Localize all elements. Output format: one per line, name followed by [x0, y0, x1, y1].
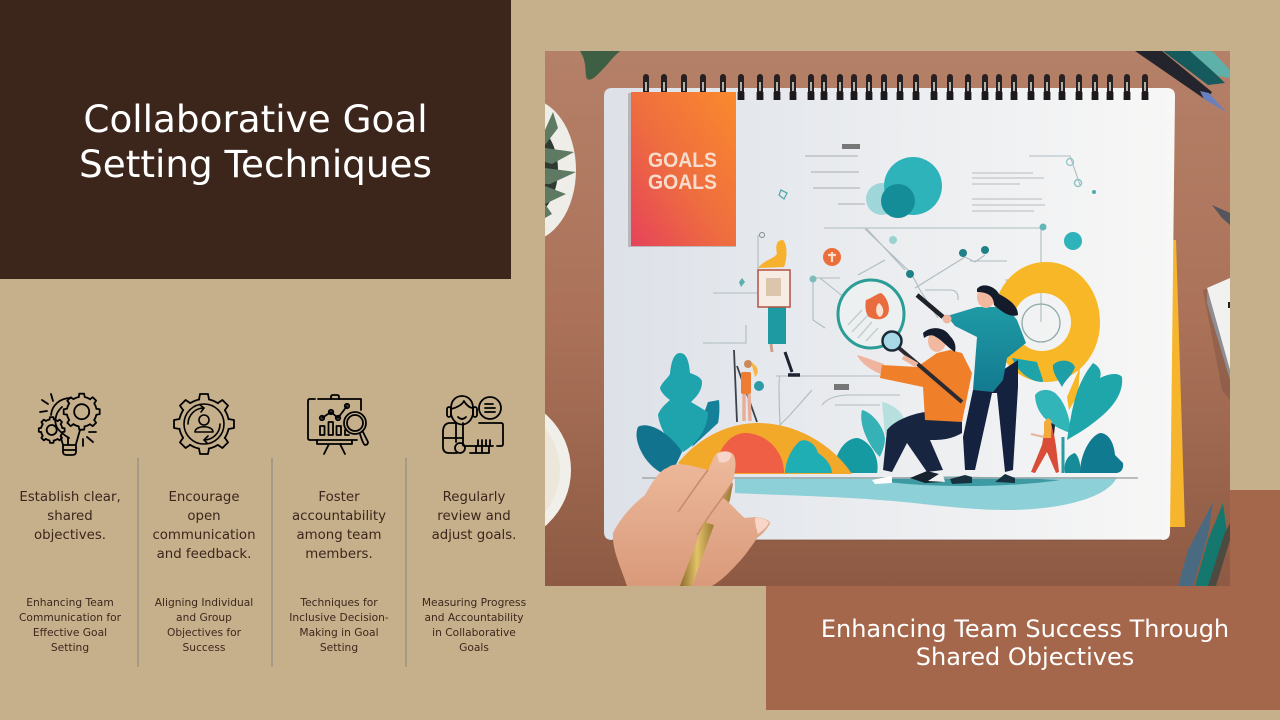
spiral binding	[643, 74, 1148, 100]
text: objective 2: communication	[152, 528, 256, 543]
text: objective 1	[19, 490, 121, 543]
text: caption 3: Making in Goal	[299, 626, 379, 639]
orange goals notepad: GOALS	[648, 149, 717, 172]
title	[79, 97, 432, 186]
text: objective 1: Establish clear,	[19, 490, 121, 505]
text: objective 4: review and	[437, 509, 511, 524]
text: caption 2: Aligning Individual	[155, 596, 253, 609]
yellow ring	[993, 262, 1100, 382]
text: objective 1: objectives.	[34, 528, 106, 543]
figure: woman with document	[758, 240, 800, 375]
standing woman	[917, 285, 1026, 484]
text: objective 2	[152, 490, 256, 562]
text: objective 2: and feedback.	[157, 547, 251, 562]
text: caption 1: Effective Goal	[33, 626, 107, 639]
text: caption 2	[154, 596, 253, 654]
text: caption 4: Measuring Progress	[422, 596, 526, 609]
image: hand drawing on goals notebook	[545, 51, 1230, 586]
ground water shape	[735, 477, 1117, 510]
text: objective 4: adjust goals.	[432, 528, 516, 543]
text: caption 1: Communication for	[19, 611, 121, 624]
text: caption 2: Objectives for	[167, 626, 241, 639]
text: caption 4	[422, 596, 526, 654]
text: objective 3: among team	[296, 528, 382, 543]
text: caption 4: and Accountability	[424, 611, 524, 624]
yellow back sheet	[1170, 240, 1185, 527]
text: objective 2: Encourage	[168, 490, 240, 505]
text: caption 1: Setting	[51, 641, 89, 654]
right plant	[1012, 358, 1123, 473]
pencil right	[1212, 205, 1230, 225]
text: objective 2: open	[187, 509, 221, 524]
text: objective 4	[432, 490, 516, 543]
teal circles	[866, 157, 1082, 250]
orange goals notepad: GOALS	[648, 171, 717, 194]
small notebook right	[1203, 278, 1230, 400]
leaves: centre plant	[834, 402, 905, 473]
text: objective 3: members.	[305, 547, 373, 562]
text: caption 1: Enhancing Team	[26, 596, 114, 609]
text: caption 3: Setting	[320, 641, 358, 654]
orange goals notepad	[628, 92, 736, 247]
ground line	[642, 477, 1138, 479]
text: caption 2: Success	[183, 641, 225, 654]
thin diagram lines	[703, 156, 1080, 425]
panel: subtitle background	[766, 490, 1280, 710]
text: caption 2: and Group	[176, 611, 232, 624]
text: objective 3	[292, 490, 386, 562]
subtitle: Enhancing Team Success Through	[821, 615, 1229, 643]
subtitle	[821, 615, 1229, 671]
plant bowl	[545, 104, 576, 236]
text: caption 4: Goals	[459, 641, 489, 654]
magnifier ring	[838, 280, 904, 348]
title: Collaborative Goal	[83, 97, 428, 141]
leaf at top	[580, 51, 620, 80]
fingernails	[717, 452, 769, 534]
seated woman	[857, 328, 972, 484]
small red figure	[1031, 418, 1059, 473]
orange badge	[823, 248, 841, 266]
pen	[723, 483, 733, 503]
title: Setting Techniques	[79, 142, 432, 186]
small text lines	[972, 173, 1045, 211]
small nodes	[735, 144, 1096, 390]
text: caption 3	[289, 596, 389, 654]
yellow dome	[678, 423, 852, 474]
text: caption 4: in Collaborative	[432, 626, 516, 639]
subtitle: Shared Objectives	[916, 643, 1134, 671]
pen over fingers	[680, 522, 714, 586]
notebook paper	[604, 88, 1175, 540]
hand	[613, 451, 770, 586]
finger crease	[678, 470, 732, 535]
text: objective 1: shared	[47, 509, 93, 524]
pens top right	[1135, 51, 1230, 112]
text: caption 3: Inclusive Decision-	[289, 611, 389, 624]
figure: small person with pole	[734, 350, 764, 422]
leaves: left plant	[637, 353, 719, 473]
desk surface	[545, 51, 1230, 586]
text: objective 4: Regularly	[443, 490, 505, 505]
red dome	[715, 433, 784, 473]
text: objective 3: Foster	[318, 490, 360, 505]
text: caption 3: Techniques for	[300, 596, 378, 609]
plate	[545, 414, 571, 526]
teal bush	[785, 440, 832, 473]
bottom right pencils	[1178, 502, 1230, 586]
text: objective 3: accountability	[292, 509, 386, 524]
ground shadow	[875, 477, 1060, 486]
text: caption 1	[19, 596, 121, 654]
panel: title background	[0, 0, 511, 279]
